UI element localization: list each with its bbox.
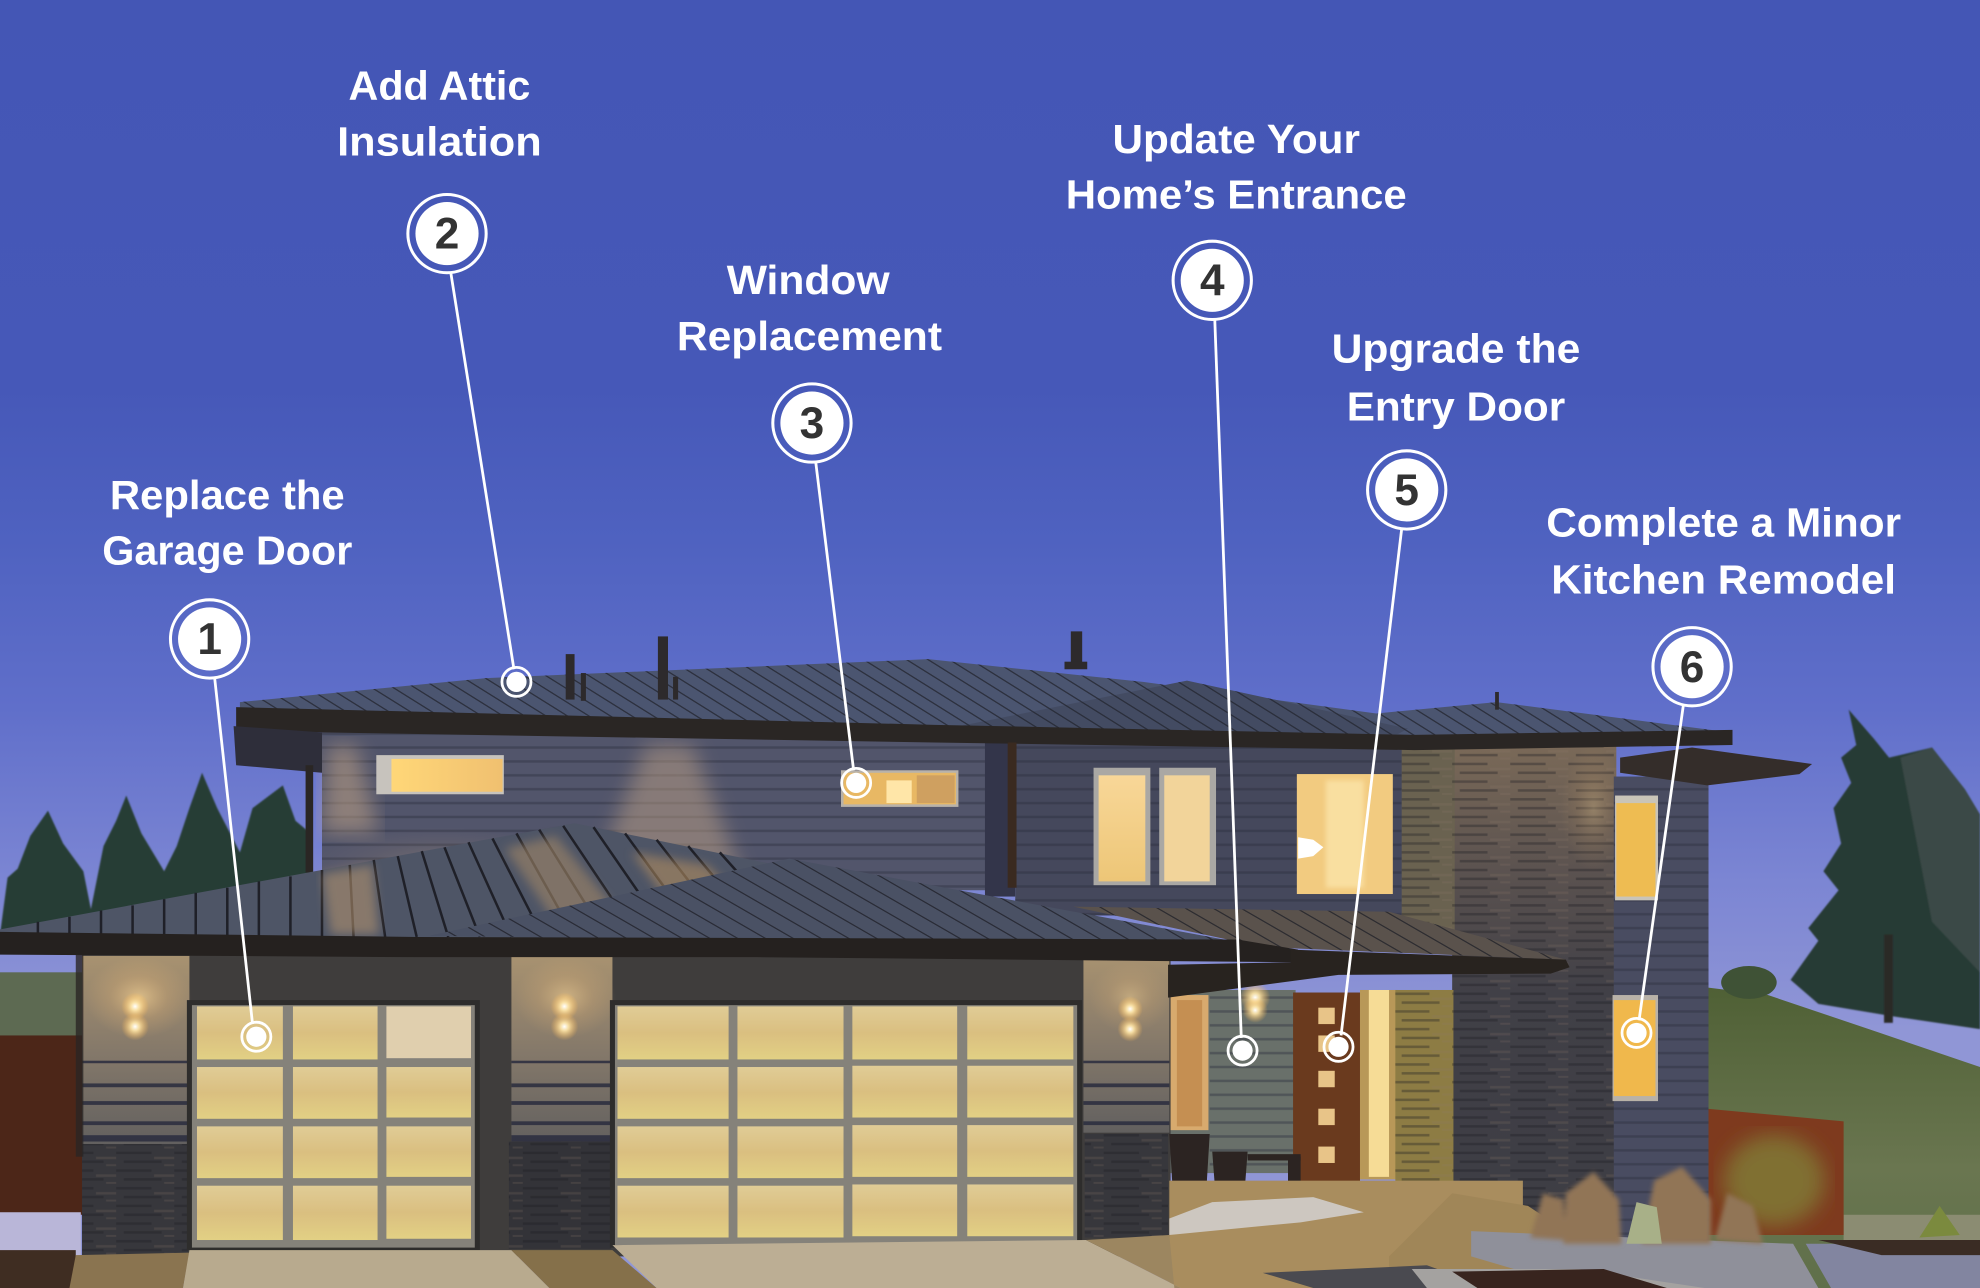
driveway and paths [69,1181,1566,1288]
label: Replace the [110,472,345,518]
lower garage roof [0,823,1570,1157]
target dot [842,768,871,797]
wall lights [121,993,1143,1042]
number badge [1653,628,1731,706]
target dot [1622,1018,1651,1047]
label: Kitchen Remodel [1551,556,1896,602]
callout 3: window replacement [677,257,942,797]
leader line [1215,319,1241,1038]
target dot [1324,1032,1353,1061]
number badge: 4 [1200,256,1225,305]
entry: porch wall, door, sidelight [1169,982,1453,1187]
target dot [502,667,531,696]
number badge [408,194,486,273]
number badge [1368,451,1446,529]
callout 5: upgrade the entry door [1324,325,1580,1061]
leader line [215,678,253,1024]
number badge: 1 [197,615,222,664]
label: Entry Door [1347,383,1565,429]
number badge [1173,241,1251,319]
callout 4: update your home's entrance [1066,116,1407,1065]
leader line [451,273,514,669]
callout 6: complete a minor kitchen remodel [1546,500,1901,1047]
upper storey walls [303,726,1407,915]
number badge: 5 [1394,466,1419,515]
target dot [242,1022,271,1051]
window: twin upper [1094,768,1216,885]
number badge: 6 [1680,643,1704,692]
label: Upgrade the [1332,325,1580,371]
window: kitchen [1613,995,1658,1101]
callout 1: replace the garage door [102,472,353,1051]
trees: left tree line [0,773,311,941]
roof vents and chimneys [566,631,1499,710]
label: Replacement [677,313,942,359]
upper roof [234,659,1812,888]
left garden: grass and wood fence [0,972,83,1288]
garage door: left [187,1000,480,1250]
stone tower [1402,742,1626,1241]
number badge [773,384,851,462]
window: right upper [1615,796,1658,900]
label: Home’s Entrance [1066,171,1407,217]
window: upper left [376,755,504,794]
right wing wall [1614,777,1709,1244]
leader line [1639,706,1683,1020]
label: Add Attic [349,63,530,109]
landscaped planter beds with grasses [1412,1167,1980,1288]
garage wall band [82,953,1171,1256]
leader line [1341,529,1402,1035]
garage door: right [610,1000,1082,1248]
label: Update Your [1112,116,1360,162]
stone bases [82,1134,1168,1255]
target dot [1228,1036,1257,1065]
window: replacement window [841,770,958,807]
label: Complete a Minor [1546,500,1901,546]
callout 2: add attic insulation [337,63,542,696]
number badge: 3 [800,399,824,448]
label: Window [727,257,890,303]
leader line [816,462,854,770]
right wood fence with lit shrub [1707,1109,1844,1235]
planters by the entry [1169,1134,1301,1219]
background: hillside and lawn [1707,966,1980,1288]
trees: right evergreen [1791,710,1980,1029]
window: large upper [1297,774,1393,894]
number badge [170,600,249,678]
label: Insulation [337,118,542,164]
number badge: 2 [435,210,459,259]
label: Garage Door [102,527,353,573]
